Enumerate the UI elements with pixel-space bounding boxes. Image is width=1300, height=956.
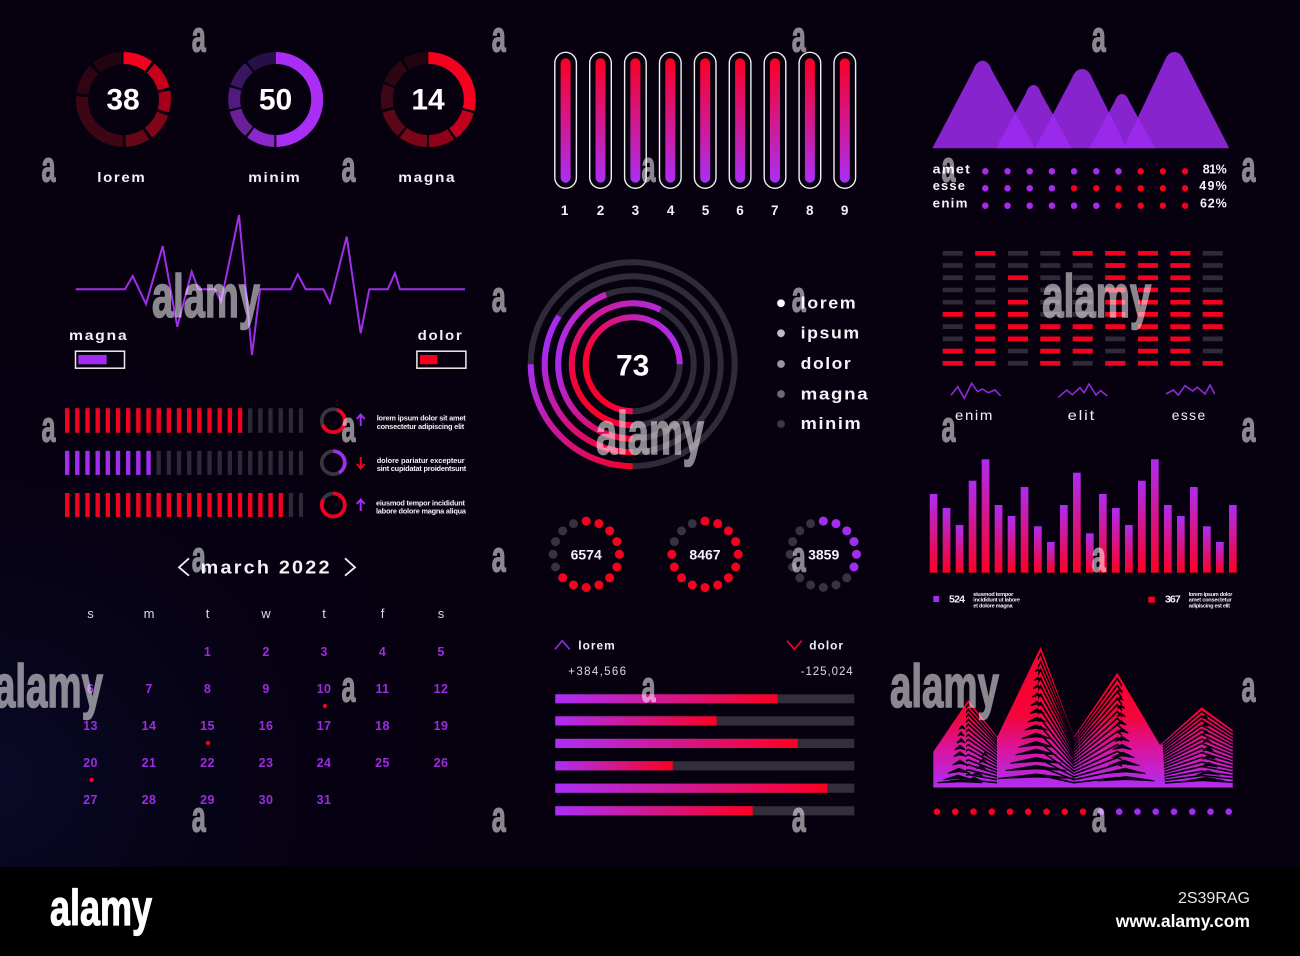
legend 367: amet consectetur — [1189, 598, 1233, 604]
donut value 50: 50 — [259, 84, 292, 116]
calendar days: 2 — [262, 645, 270, 659]
calendar weekdays: m — [144, 606, 154, 621]
watermarks: a — [792, 272, 806, 322]
calendar days: 17 — [317, 719, 331, 733]
donut label minim: minim — [248, 169, 301, 185]
equalizer chart — [943, 251, 1223, 366]
legend 524: eiusmod tempor — [973, 592, 1014, 598]
watermarks: a — [192, 792, 206, 842]
gauge: dolor — [417, 351, 466, 368]
label elit: elit — [1068, 407, 1096, 423]
calendar days: 10 — [317, 682, 331, 696]
calendar days: 13 — [83, 719, 98, 733]
footer bar: 2S39RAG — [1178, 890, 1250, 907]
calendar days: 12 — [434, 682, 448, 696]
donut: minim 50 — [234, 58, 317, 141]
calendar days: 27 — [83, 793, 98, 807]
layered line mountain chart — [933, 647, 1233, 787]
chevron up — [555, 641, 570, 649]
calendar days — [83, 645, 448, 807]
arrow up — [357, 500, 365, 511]
tube numbers: 1 — [561, 203, 569, 218]
radial legend: magna — [801, 384, 869, 403]
label lorem: lorem — [578, 639, 616, 653]
legend 524: 524 — [949, 594, 965, 606]
tube numbers: 6 — [736, 203, 744, 218]
calendar days: 1 — [204, 645, 211, 659]
arrow up — [357, 414, 365, 426]
progress row 3 — [65, 493, 303, 517]
watermarks: a — [42, 402, 56, 452]
calendar days: 19 — [434, 719, 448, 733]
calendar days: 21 — [142, 756, 156, 770]
calendar days: 6 — [87, 682, 94, 696]
mini donut row 3 — [322, 494, 345, 516]
note row 3: labore dolore magna aliqua — [376, 507, 467, 516]
dot matrix — [985, 171, 1186, 206]
calendar weekdays — [87, 606, 445, 621]
tube numbers: 9 — [841, 203, 848, 218]
P1 wedges — [959, 726, 965, 729]
donut label magna: magna — [398, 169, 456, 185]
dot matrix labels: enim — [933, 195, 969, 210]
note row 2: sint cupidatat proidentsunt — [377, 464, 467, 473]
calendar days: 31 — [317, 793, 331, 807]
P4 wedges — [1202, 715, 1208, 718]
legend 367: lorem ipsum dolor — [1189, 592, 1233, 598]
calendar days: 29 — [200, 793, 215, 807]
tube numbers: 8 — [806, 203, 814, 218]
watermarks: alamy — [152, 263, 260, 330]
P3 wedges — [1118, 689, 1122, 692]
legend 524: et dolore magna — [973, 603, 1013, 609]
label magna: magna — [69, 327, 128, 343]
calendar days: 25 — [375, 756, 390, 770]
calendar weekdays: f — [381, 606, 385, 621]
radial legend: lorem — [801, 293, 857, 312]
watermarks: a — [492, 12, 506, 62]
dot ring 8467: 8467 — [689, 546, 721, 562]
note row 1 — [377, 414, 466, 431]
donut: lorem 38 — [82, 58, 165, 141]
tube numbers: 3 — [632, 203, 640, 218]
horizontal bars — [555, 694, 854, 815]
label esse: esse — [1172, 407, 1207, 423]
watermarks: a — [792, 12, 806, 62]
watermarks: a — [1242, 402, 1256, 452]
watermarks: a — [942, 402, 956, 452]
calendar event markers — [89, 704, 327, 782]
donut: magna 14 — [387, 58, 470, 141]
watermarks: a — [792, 792, 806, 842]
label enim: enim — [955, 407, 994, 423]
sparkline enim — [951, 383, 1001, 398]
tube numbers: 2 — [597, 203, 604, 218]
note row 3 — [376, 498, 467, 516]
dot matrix percentages: 81% — [1203, 162, 1227, 176]
progress row 2 — [65, 451, 303, 475]
dot matrix labels — [933, 161, 971, 210]
P2 wedges — [1035, 669, 1041, 671]
calendar heading — [179, 557, 355, 577]
tube numbers: 4 — [667, 203, 675, 218]
watermarks: a — [192, 532, 206, 582]
dot matrix labels: amet — [933, 161, 971, 176]
dot matrix labels: esse — [933, 178, 966, 193]
calendar weekdays: s — [438, 606, 445, 621]
calendar weekdays: t — [322, 606, 326, 621]
watermarks: alamy — [596, 400, 704, 467]
calendar weekdays: w — [260, 606, 271, 621]
dot ring 6574 — [553, 521, 619, 588]
calendar days: 3 — [320, 645, 328, 659]
radial legend: ipsum — [801, 323, 861, 342]
tube numbers: 7 — [771, 203, 779, 218]
note row 2 — [377, 456, 467, 473]
calendar days: 30 — [259, 793, 273, 807]
tube numbers: 5 — [702, 203, 710, 218]
watermarks: a — [492, 272, 506, 322]
legend 367: adipiscing est elit — [1189, 603, 1230, 609]
calendar days: 20 — [83, 756, 98, 770]
calendar days: 14 — [142, 719, 156, 733]
calendar days: 24 — [317, 756, 331, 770]
calendar days: 16 — [259, 719, 273, 733]
calendar days: 26 — [434, 756, 448, 770]
watermarks: a — [1242, 662, 1256, 712]
watermarks: a — [342, 402, 356, 452]
dot ring 8467 — [672, 521, 738, 588]
calendar days: 9 — [262, 682, 270, 696]
radial value 73: 73 — [616, 350, 649, 382]
watermarks: a — [342, 142, 356, 192]
watermarks: a — [492, 532, 506, 582]
donut value 14: 14 — [411, 84, 445, 116]
radial progress chart — [531, 262, 735, 466]
legend 524 — [933, 592, 1020, 609]
column bar chart — [930, 459, 1237, 573]
watermarks: a — [1242, 142, 1256, 192]
calendar days: 18 — [375, 719, 390, 733]
watermarks: a — [642, 142, 656, 192]
calendar days: 28 — [142, 793, 156, 807]
dot matrix percentages: 62% — [1200, 196, 1227, 210]
radial legend: dolor — [801, 354, 852, 373]
calendar weekdays: t — [206, 606, 210, 621]
watermarks: a — [642, 662, 656, 712]
legend 367 — [1148, 592, 1233, 609]
sparkline elit — [1058, 384, 1107, 397]
progress row 1 — [65, 408, 303, 433]
tube chart — [555, 52, 856, 188]
watermarks: a — [492, 792, 506, 842]
calendar days: 8 — [204, 682, 211, 696]
dot matrix percentages — [1199, 162, 1227, 210]
note row 1: lorem ipsum dolor sit amet — [377, 414, 466, 423]
dot matrix percentages: 49% — [1199, 179, 1227, 193]
calendar days: 22 — [200, 756, 215, 770]
watermarks: alamy — [890, 653, 999, 720]
label dolor: dolor — [418, 327, 463, 343]
tube numbers — [561, 203, 848, 218]
footer bar — [0, 867, 1300, 956]
footer bar: alamy — [50, 880, 152, 936]
calendar days: 11 — [375, 682, 390, 696]
note row 3: eiusmod tempor incididunt — [376, 498, 466, 507]
calendar days: 4 — [379, 645, 386, 659]
watermarks: a — [1092, 792, 1106, 842]
watermarks: a — [1092, 532, 1106, 582]
note row 1: consectetur adipiscing elit — [377, 422, 465, 431]
dot ring 3859: 3859 — [808, 546, 839, 562]
calendar days: 5 — [437, 645, 445, 659]
sparkline esse — [1166, 385, 1215, 395]
watermarks: a — [792, 532, 806, 582]
calendar days: 7 — [145, 682, 153, 696]
watermarks: alamy — [1042, 263, 1152, 330]
purple mountain chart — [932, 52, 1229, 148]
radial legend — [777, 293, 869, 433]
watermarks: a — [1092, 12, 1106, 62]
mini donut row 2 — [322, 451, 345, 474]
note row 2: dolore pariatur excepteur — [377, 456, 465, 465]
dot ring 6574: 6574 — [571, 546, 602, 562]
calendar days: 15 — [200, 719, 215, 733]
arrow down — [357, 457, 365, 468]
gauge: magna — [76, 351, 124, 368]
ECG pulse line — [76, 215, 465, 355]
radial legend: minim — [801, 414, 862, 433]
value -125,024: -125,024 — [801, 666, 853, 678]
calendar days: 23 — [259, 756, 273, 770]
dot ring 3859 — [790, 521, 856, 588]
legend 367: 367 — [1165, 594, 1181, 606]
watermarks: a — [342, 662, 356, 712]
watermarks: a — [42, 142, 56, 192]
watermarks: a — [192, 12, 206, 62]
watermarks: a — [942, 142, 956, 192]
donut label lorem: lorem — [97, 169, 146, 185]
calendar weekdays: s — [87, 606, 94, 621]
value +384,566: +384,566 — [568, 666, 626, 678]
footer bar: www.alamy.com — [1115, 911, 1250, 931]
legend 524: incididunt ut labore — [973, 598, 1020, 604]
chevron down — [787, 641, 802, 649]
dot timeline — [937, 808, 1234, 815]
donut value 38: 38 — [106, 84, 140, 116]
calendar heading: march 2022 — [201, 557, 332, 577]
label dolor: dolor — [809, 639, 844, 653]
mini donut row 1 — [322, 409, 345, 432]
